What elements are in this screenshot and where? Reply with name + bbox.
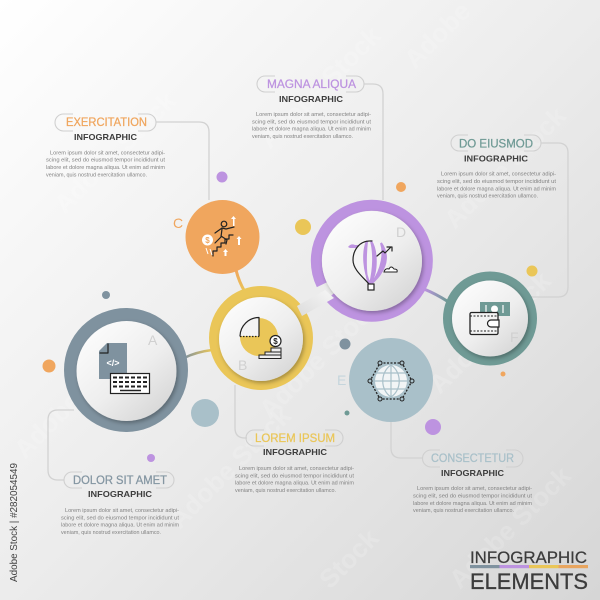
body text: veniam, quis nostrud exercitation ullamco.	[413, 508, 514, 514]
title: Infographic Elements	[470, 549, 588, 594]
label block: Lorem Ipsum	[235, 430, 354, 494]
label block: Magna Aliqua	[252, 76, 371, 140]
subheading: INFOGRAPHIC	[279, 94, 343, 104]
letter D: D	[396, 224, 406, 240]
body text: scing elit, sed do eiusmod tempor incididunt ut	[61, 515, 179, 521]
subheading: INFOGRAPHIC	[464, 154, 528, 164]
pill heading: LOREM IPSUM	[255, 433, 335, 445]
watermark: Stock	[313, 523, 385, 594]
icon: pie chart with coins: $	[273, 337, 278, 346]
icon: hot air balloon	[348, 241, 397, 290]
body text: scing elit, sed do eiusmod tempor incididunt ut	[252, 119, 371, 125]
body text: labore et dolore magna aliqua. Ut enim ad minim	[413, 501, 532, 507]
label block: Consectetur	[413, 450, 532, 514]
body text: labore et dolore magna aliqua. Ut enim ad minim	[46, 165, 165, 171]
subheading: INFOGRAPHIC	[263, 447, 327, 457]
body text: veniam, quis nostrud exercitation ullamco.	[252, 134, 353, 140]
body text: Lorem ipsum dolor sit amet, consectetur adipi-	[239, 466, 354, 472]
body text: labore et dolore magna aliqua. Ut enim ad minim	[437, 186, 556, 192]
watermark: Adobe Stock	[438, 100, 572, 234]
body text: veniam, quis nostrud exercitation ullamco.	[437, 194, 538, 200]
body text: veniam, quis nostrud exercitation ullamco.	[235, 488, 336, 494]
letter F: F	[510, 329, 519, 345]
body text: scing elit, sed do eiusmod tempor incididunt ut	[46, 158, 165, 164]
node links	[184, 270, 447, 358]
body text: labore et dolore magna aliqua. Ut enim ad minim	[252, 127, 371, 133]
body text: Lorem ipsum dolor sit amet, consectetur adipi-	[256, 112, 371, 118]
letter B: B	[238, 357, 247, 373]
letter A: A	[148, 332, 158, 348]
letter C: C	[173, 215, 183, 231]
title: Infographic Elements: INFOGRAPHIC	[470, 549, 587, 567]
connector lines to labels	[48, 84, 568, 480]
watermark: Adobe Stock	[253, 20, 387, 154]
node F	[443, 272, 537, 366]
body text: scing elit, sed do eiusmod tempor incididunt ut	[235, 474, 354, 480]
body text: labore et dolore magna aliqua. Ut enim ad minim	[61, 523, 179, 529]
label block: Exercitation	[46, 114, 165, 178]
vertical stock credit: Adobe Stock | #282054549	[8, 463, 20, 582]
body text	[252, 112, 371, 140]
subheading: INFOGRAPHIC	[441, 468, 504, 478]
pill heading: CONSECTETUR	[431, 453, 514, 465]
watermark: Adobe Stock	[253, 290, 387, 424]
watermark: Adobe Stock	[423, 265, 557, 399]
pill heading: EXERCITATION	[66, 117, 147, 129]
body text	[61, 508, 179, 536]
icon: code file and keyboard: </>	[106, 358, 120, 368]
label block: Do Eiusmod	[437, 135, 556, 200]
body text: Lorem ipsum dolor sit amet, consectetur adipi-	[417, 486, 532, 492]
subheading: INFOGRAPHIC	[74, 132, 137, 142]
body text: scing elit, sed do eiusmod tempor incididunt ut	[437, 179, 556, 185]
body text: scing elit, sed do eiusmod tempor incididunt ut	[413, 493, 532, 499]
decorative dots	[42, 172, 538, 462]
light band between nodes B and D	[297, 290, 334, 316]
watermark: Adobe Stock	[443, 460, 577, 594]
node E	[337, 338, 433, 422]
body text: Lorem ipsum dolor sit amet, consectetur adipi-	[50, 150, 165, 156]
letter E: E	[337, 372, 346, 388]
subheading: INFOGRAPHIC	[88, 489, 152, 499]
body text: Lorem ipsum dolor sit amet, consectetur adipi-	[441, 172, 556, 178]
body text: veniam, quis nostrud exercitation ullamco.	[61, 530, 161, 536]
node C	[173, 200, 260, 274]
body text: Lorem ipsum dolor sit amet, consectetur adipi-	[65, 508, 179, 514]
body text	[46, 150, 165, 178]
icon: wallet with banknote	[470, 302, 510, 334]
label block: Dolor Sit Amet	[61, 472, 179, 536]
watermark: Adobe Stock	[48, 85, 182, 219]
icon: globe network	[368, 361, 414, 401]
pill heading: MAGNA ALIQUA	[267, 79, 356, 91]
pill heading: DOLOR SIT AMET	[73, 475, 167, 487]
node D	[297, 205, 427, 316]
body text	[413, 486, 532, 514]
watermark: Adobe Stock	[163, 400, 297, 534]
icon: climbing stairs: $	[205, 236, 210, 245]
node B	[209, 286, 313, 390]
title colour bar	[470, 565, 588, 568]
title: Infographic Elements: ELEMENTS	[470, 569, 588, 594]
body text: veniam, quis nostrud exercitation ullamco.	[46, 172, 147, 178]
pill heading: DO EIUSMOD	[459, 139, 533, 151]
body text: labore et dolore magna aliqua. Ut enim ad minim	[235, 481, 354, 487]
body text	[235, 466, 354, 494]
body text	[437, 172, 556, 200]
watermark: Adobe Stock	[8, 330, 142, 464]
node A	[64, 308, 188, 432]
